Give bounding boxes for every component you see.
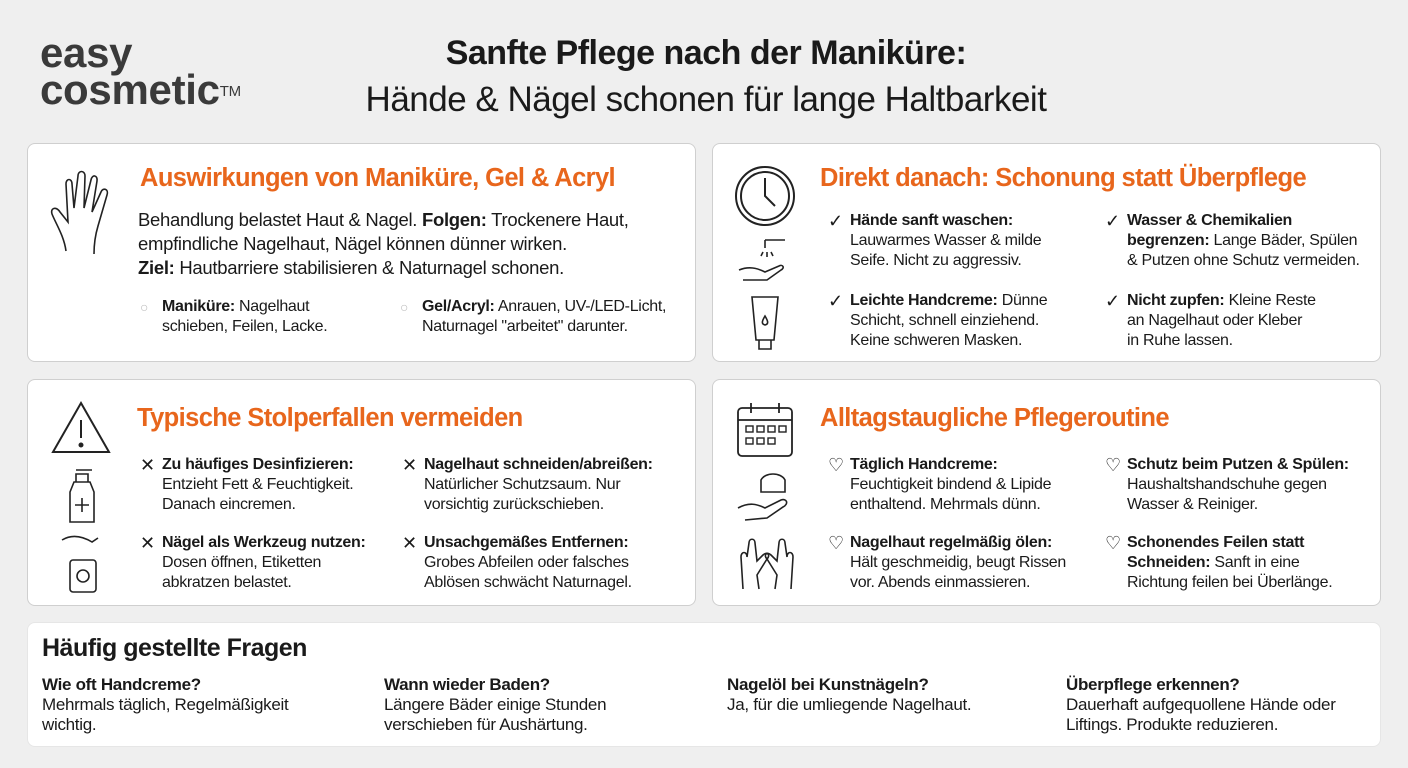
panel: Auswirkungen: ○ bbox=[400, 299, 408, 315]
text block: Ziel: Hautbarriere stabilisieren & Naturnagel schonen. bbox=[138, 257, 564, 278]
item: Werkzeug: Nägel als Werkzeug nutzen: bbox=[162, 534, 366, 551]
panel: FAQ bbox=[27, 622, 1381, 747]
title: Sanfte Pflege nach der Maniküre: bbox=[446, 34, 966, 72]
item: Nagelhaut schneiden: Natürlicher Schutzsaum. Nur bbox=[424, 476, 620, 493]
item: Entfernen bbox=[402, 533, 632, 591]
bullet: Gel/Acryl: Naturnagel "arbeitet" darunter. bbox=[422, 318, 628, 335]
item: waschen: Seife. Nicht zu aggressiv. bbox=[850, 252, 1022, 269]
item: Handcreme: Feuchtigkeit bindend & Lipide bbox=[850, 476, 1051, 493]
item: Entfernen: Unsachgemäßes Entfernen: bbox=[424, 534, 628, 551]
bullet: Maniküre: Maniküre: Nagelhaut bbox=[162, 298, 309, 315]
faq 4: Überpflege erkennen? bbox=[1066, 675, 1240, 694]
faq 4 bbox=[1066, 675, 1336, 734]
icon: gloves bbox=[740, 538, 794, 590]
item: ölen bbox=[828, 533, 1066, 591]
item: Wasser: begrenzen: Lange Bäder, Spülen bbox=[1127, 232, 1357, 249]
faq 4: Liftings. Produkte reduzieren. bbox=[1066, 715, 1278, 734]
icon: clock bbox=[735, 166, 795, 226]
item: Handcreme bbox=[828, 455, 1051, 513]
item: Feilen: Schonendes Feilen statt bbox=[1127, 534, 1304, 551]
item: Handcreme: Schicht, schnell einziehend. bbox=[850, 312, 1039, 329]
item: Nagelhaut schneiden: Nagelhaut schneiden/abreißen: bbox=[424, 456, 653, 473]
item: ölen: Hält geschmeidig, beugt Rissen bbox=[850, 554, 1066, 571]
item: Schutz: Wasser & Reiniger. bbox=[1127, 496, 1258, 513]
bullet: Maniküre bbox=[140, 298, 327, 335]
faq 3: Nagelöl bei Kunstnägeln? bbox=[727, 675, 929, 694]
panel: Pflegeroutine: ♡ bbox=[828, 533, 844, 553]
icon: cream hand bbox=[738, 473, 788, 521]
panel: Auswirkungen: ○ bbox=[140, 299, 148, 315]
faq 2: Wann wieder Baden? bbox=[384, 675, 550, 694]
faq 2: Längere Bäder einige Stunden bbox=[384, 695, 606, 714]
item: nicht zupfen: Nicht zupfen: Kleine Reste bbox=[1127, 292, 1316, 309]
faq 3: Ja, für die umliegende Nagelhaut. bbox=[727, 695, 971, 714]
panel: Direkt danach bbox=[712, 143, 1381, 362]
item: nicht zupfen: an Nagelhaut oder Kleber bbox=[1127, 312, 1302, 329]
panel: Stolperfallen: ✕ bbox=[140, 455, 155, 475]
item: waschen bbox=[828, 211, 1041, 269]
item: Schutz bbox=[1105, 455, 1349, 513]
faq 1: wichtig. bbox=[42, 715, 96, 734]
faq 2: verschieben für Aushärtung. bbox=[384, 715, 588, 734]
panel: Direkt danach: ✓ bbox=[1105, 291, 1120, 311]
panel: Auswirkungen bbox=[27, 143, 696, 362]
item: Desinfizieren: Entzieht Fett & Feuchtigkeit. bbox=[162, 476, 353, 493]
panel: Direkt danach: ✓ bbox=[828, 211, 843, 231]
text block: Behandlung belastet Haut & Nagel. Folgen: Trockenere Haut, bbox=[138, 209, 629, 230]
heading: Auswirkungen von Maniküre, Gel & Acryl bbox=[140, 164, 615, 192]
text block bbox=[138, 209, 629, 278]
panel: Direkt danach: ✓ bbox=[828, 291, 843, 311]
item: Entfernen: Grobes Abfeilen oder falsches bbox=[424, 554, 629, 571]
item: Nagelhaut schneiden bbox=[402, 455, 653, 513]
logo bbox=[40, 29, 241, 113]
title bbox=[366, 34, 1047, 119]
item: Werkzeug: Dosen öffnen, Etiketten bbox=[162, 554, 321, 571]
item: ölen: vor. Abends einmassieren. bbox=[850, 574, 1030, 591]
item: Handcreme bbox=[828, 291, 1047, 349]
icon: calendar bbox=[737, 403, 793, 457]
item: Nagelhaut schneiden: vorsichtig zurückschieben. bbox=[424, 496, 604, 513]
panel: Pflegeroutine bbox=[712, 379, 1381, 606]
logo: easy bbox=[40, 29, 132, 76]
item: Wasser: Wasser & Chemikalien bbox=[1127, 212, 1292, 229]
item: Handcreme: enthaltend. Mehrmals dünn. bbox=[850, 496, 1041, 513]
item: ölen: Nagelhaut regelmäßig ölen: bbox=[850, 534, 1052, 551]
text block: empfindliche Nagelhaut, Nägel können dünner wirken. bbox=[138, 233, 567, 254]
title: Hände & Nägel schonen für lange Haltbarkeit bbox=[366, 80, 1046, 119]
item: Werkzeug: abkratzen belastet. bbox=[162, 574, 292, 591]
item: Desinfizieren: Danach eincremen. bbox=[162, 496, 296, 513]
icon: can opener hand bbox=[62, 536, 98, 593]
item: Feilen bbox=[1105, 533, 1332, 591]
panel: Stolperfallen: ✕ bbox=[402, 533, 417, 553]
item: waschen: Lauwarmes Wasser & milde bbox=[850, 232, 1041, 249]
item: Wasser bbox=[1105, 211, 1360, 269]
item: Feilen: Schneiden: Sanft in eine bbox=[1127, 554, 1299, 571]
panel: Stolperfallen: ✕ bbox=[140, 533, 155, 553]
item: Handcreme: Keine schweren Masken. bbox=[850, 332, 1022, 349]
faq 1: Mehrmals täglich, Regelmäßigkeit bbox=[42, 695, 288, 714]
item: Entfernen: Ablösen schwächt Naturnagel. bbox=[424, 574, 632, 591]
faq 1 bbox=[42, 675, 289, 734]
bullet: Maniküre: schieben, Feilen, Lacke. bbox=[162, 318, 327, 335]
panel: Pflegeroutine: ♡ bbox=[828, 455, 844, 475]
panel: Stolperfallen: ✕ bbox=[402, 455, 417, 475]
panel: Pflegeroutine: ♡ bbox=[1105, 533, 1121, 553]
item: Feilen: Richtung feilen bei Überlänge. bbox=[1127, 574, 1332, 591]
item: Desinfizieren bbox=[140, 455, 353, 513]
panel: Stolperfallen bbox=[27, 379, 696, 606]
item: Handcreme: Täglich Handcreme: bbox=[850, 456, 998, 473]
item: nicht zupfen bbox=[1105, 291, 1316, 349]
heading: Alltagstaugliche Pflegeroutine bbox=[820, 404, 1169, 432]
heading: FAQ: Häufig gestellte Fragen bbox=[42, 634, 307, 662]
item: nicht zupfen: in Ruhe lassen. bbox=[1127, 332, 1233, 349]
icon: washing hands bbox=[738, 239, 785, 281]
item: Schutz: Haushaltshandschuhe gegen bbox=[1127, 476, 1327, 493]
faq 2 bbox=[384, 675, 606, 734]
bullet: Gel/Acryl bbox=[400, 298, 666, 335]
icon: spray bbox=[69, 469, 95, 523]
heading: Typische Stolperfallen vermeiden bbox=[137, 404, 523, 432]
panel: Pflegeroutine: ♡ bbox=[1105, 455, 1121, 475]
faq 3 bbox=[727, 675, 971, 714]
icon: hand bbox=[50, 170, 108, 254]
item: Werkzeug bbox=[140, 533, 366, 591]
item: Handcreme: Leichte Handcreme: Dünne bbox=[850, 292, 1047, 309]
item: waschen: Hände sanft waschen: bbox=[850, 212, 1013, 229]
faq 1: Wie oft Handcreme? bbox=[42, 675, 201, 694]
item: Wasser: & Putzen ohne Schutz vermeiden. bbox=[1127, 252, 1360, 269]
panel: Direkt danach: ✓ bbox=[1105, 211, 1120, 231]
item: Desinfizieren: Zu häufiges Desinfizieren: bbox=[162, 456, 353, 473]
item: Schutz: Schutz beim Putzen & Spülen: bbox=[1127, 456, 1349, 473]
icon: tube bbox=[751, 296, 779, 350]
icon: warning bbox=[51, 401, 111, 453]
heading: Direkt danach: Schonung statt Überpflege bbox=[820, 164, 1306, 192]
faq 4: Dauerhaft aufgequollene Hände oder bbox=[1066, 695, 1336, 714]
logo: cosmeticTM bbox=[40, 66, 241, 113]
bullet: Gel/Acryl: Gel/Acryl: Anrauen, UV-/LED-Licht, bbox=[422, 298, 666, 315]
